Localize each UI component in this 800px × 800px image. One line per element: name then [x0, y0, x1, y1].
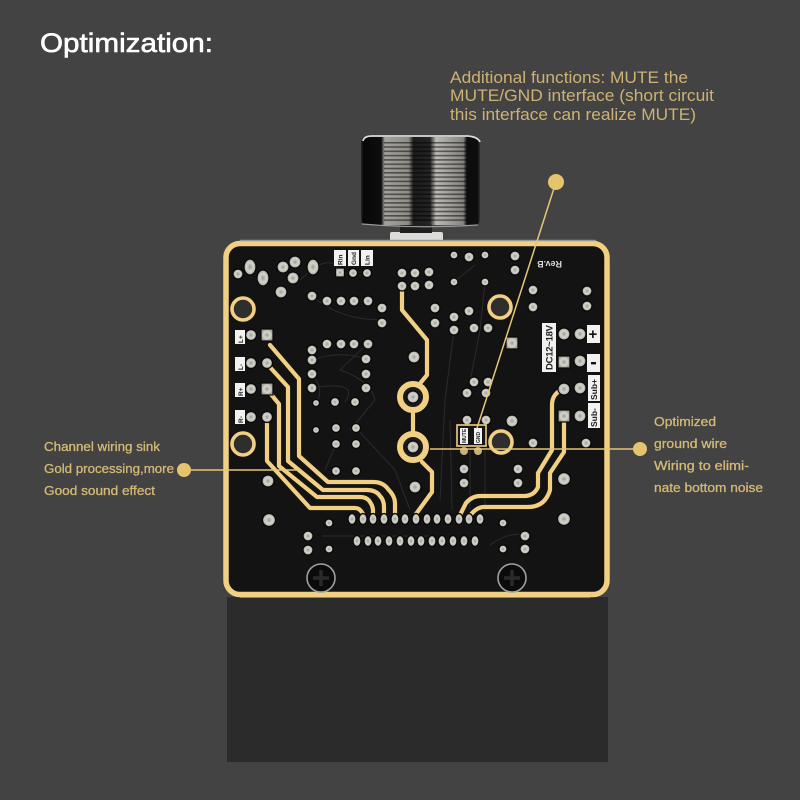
- callout text: ground wire: Wiring to elimi-: [654, 459, 749, 473]
- callout text: ground wire: Optimized: [654, 415, 716, 429]
- board body with gold edge: [226, 244, 607, 594]
- volume knob: [361, 136, 480, 242]
- silkscreen speaker labels: L-: [238, 364, 245, 370]
- silkscreen power labels: Sub-: [589, 408, 599, 427]
- mute header: [457, 425, 486, 455]
- faint copper traces: [300, 263, 530, 545]
- callout text: ground wire: nate bottom noise: [654, 481, 763, 495]
- callout text: channel wiring: Good sound effect: [44, 484, 156, 498]
- mute header: GND: [476, 432, 482, 443]
- gold traces to connector: [267, 288, 564, 518]
- callout text: mute function: this interface can realize MUTE): [450, 106, 696, 124]
- leader line: ground wire callout: [430, 442, 647, 456]
- circuit board: [226, 240, 607, 598]
- callout text: ground wire: ground wire: [654, 437, 727, 451]
- silkscreen input labels: Gnd: [351, 252, 358, 265]
- mounting rings: [232, 296, 512, 455]
- callout text: ground wire: [654, 415, 763, 495]
- silkscreen speaker labels: [235, 330, 245, 424]
- callout text: mute function: Additional functions: MUTE the: [450, 69, 688, 87]
- mounting screws: [307, 564, 526, 592]
- silkscreen power labels: +: [588, 326, 598, 343]
- silkscreen speaker labels: L+: [238, 335, 245, 343]
- silkscreen speaker labels: R+: [238, 387, 245, 396]
- leader line: channel wiring callout: [177, 463, 300, 477]
- silkscreen input labels: Lin: [364, 255, 372, 265]
- callout text: mute function: [450, 69, 714, 124]
- silkscreen input labels: Rin: [338, 254, 344, 265]
- black base block: [227, 597, 608, 762]
- callout text: channel wiring: Channel wiring sink: [44, 440, 161, 454]
- solder pads: [233, 251, 592, 555]
- silkscreen revision label: Rev.B: [537, 259, 562, 269]
- silkscreen speaker labels: R-: [238, 416, 245, 423]
- ground rings: [400, 384, 426, 460]
- silkscreen power labels: Sub+: [589, 379, 599, 400]
- connector pin rows: [348, 514, 484, 546]
- leader line: mute callout: [477, 174, 564, 428]
- silkscreen power labels: [542, 323, 600, 428]
- silkscreen power labels: DC12~18V: [544, 324, 556, 370]
- silkscreen input labels: [334, 250, 373, 266]
- callout text: mute function: MUTE/GND interface (short circuit: [450, 87, 714, 105]
- title: Optimization:: [40, 28, 213, 58]
- callout text: channel wiring: [44, 440, 174, 498]
- callout text: channel wiring: Gold processing,more: [44, 462, 174, 476]
- mute header: MUTE: [462, 428, 468, 443]
